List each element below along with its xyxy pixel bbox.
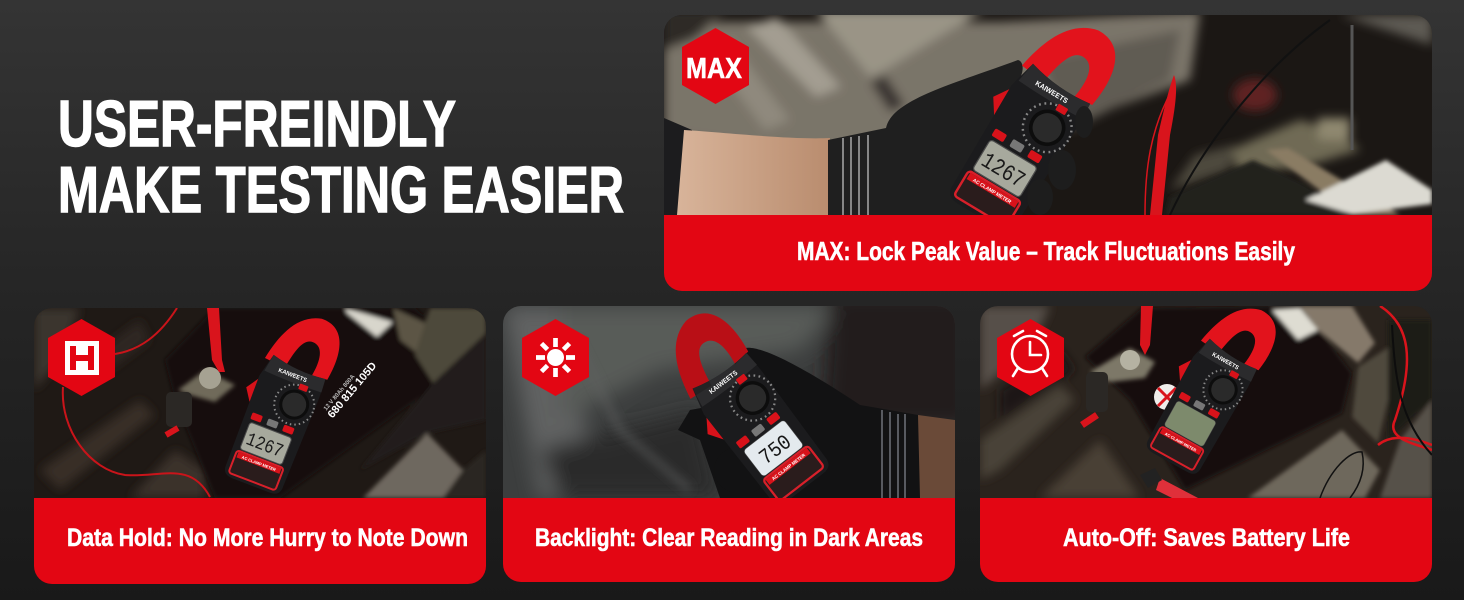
title: USER-FREINDLY: [58, 87, 456, 160]
battery label text: 680 815 105D: [326, 360, 379, 421]
caption bar: Backlight: Backlight: Clear Reading in Dark Areas: [535, 524, 923, 552]
icon: alarm clock hexagon: [997, 319, 1064, 396]
panel: Data Hold: [34, 302, 486, 584]
battery X mark: [1154, 384, 1176, 410]
meter: 1267: [243, 429, 286, 463]
icon: MAX hexagon: [682, 28, 749, 104]
title: [58, 87, 624, 226]
panel: Auto-Off: [980, 288, 1432, 582]
meter: 1267: [976, 148, 1029, 194]
caption bar: Data Hold: [34, 498, 486, 584]
photo: powered-off meter on battery: [980, 288, 1432, 498]
photo: hand holding clamp meter in engine bay: [664, 15, 1432, 215]
sleeve and skin: [915, 415, 955, 498]
icon: H hexagon: [48, 319, 115, 396]
caption bar: Backlight: [503, 498, 955, 582]
panel: Backlight: [503, 290, 975, 582]
photo: hand with backlit meter: [503, 306, 955, 498]
caption bar: MAX: [664, 215, 1432, 291]
caption bar: MAX: MAX: Lock Peak Value – Track Fluctuations Easily: [797, 236, 1295, 266]
icon: sun hexagon: [522, 319, 589, 396]
probe and wires: [1150, 75, 1176, 215]
meter: [225, 318, 340, 494]
caption bar: Auto-Off: Auto-Off: Saves Battery Life: [1063, 524, 1350, 552]
meter: 750: [755, 431, 797, 471]
panel: MAX: [664, 2, 1432, 291]
meter: [676, 313, 828, 498]
caption bar: Data Hold: Data Hold: No More Hurry to Note Down: [67, 524, 468, 552]
wires and probe: [1140, 306, 1153, 355]
red wire and probes: [115, 308, 177, 354]
title: MAKE TESTING EASIER: [58, 153, 624, 226]
meter: [954, 28, 1116, 215]
arm and glove: [664, 118, 692, 215]
icon: MAX hexagon: MAX: [686, 53, 743, 85]
meter: [1147, 308, 1276, 474]
photo: meter on car battery: [34, 302, 486, 498]
battery label text: 12 V 80Ah 800A: [323, 374, 357, 412]
caption bar: Auto-Off: [980, 498, 1432, 582]
